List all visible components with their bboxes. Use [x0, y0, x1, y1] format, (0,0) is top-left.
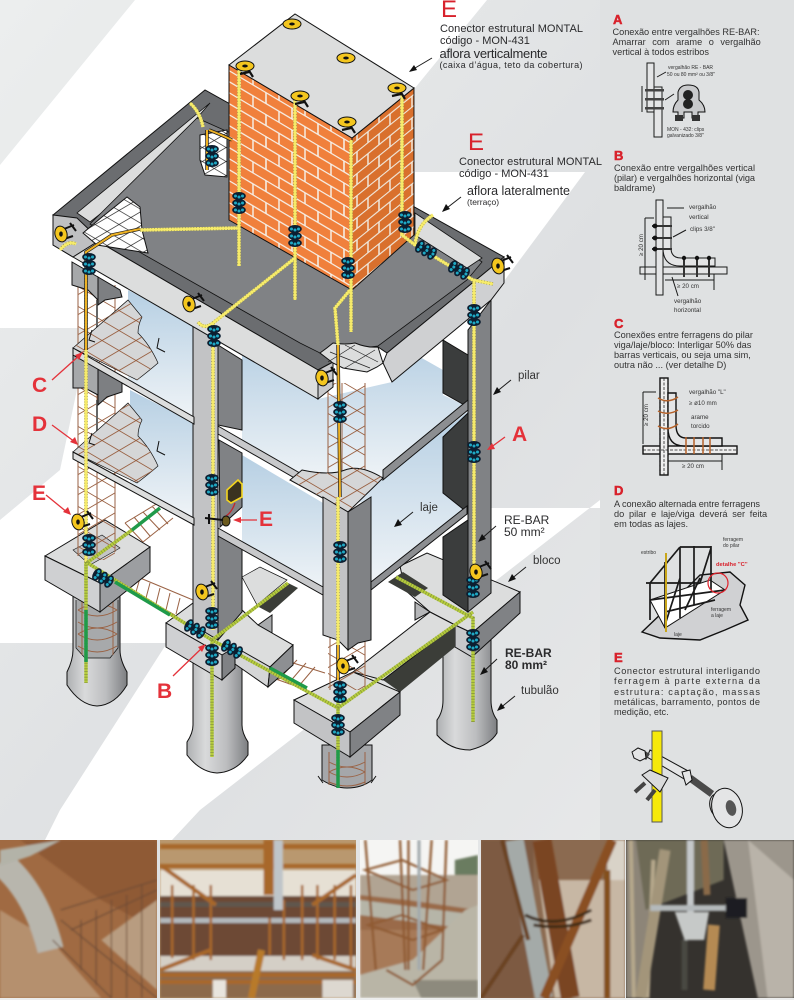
water tank [229, 14, 414, 290]
panel: detail A: A [613, 12, 623, 27]
photo 3: cage on block [360, 840, 478, 998]
callout: E terrace: E [468, 129, 484, 156]
diagram D: ferragem [711, 607, 731, 613]
panel: detail A: vertical à todos estribos [612, 47, 709, 57]
isometric building diagram [45, 14, 520, 788]
centre block [166, 603, 293, 687]
diagram C: torcido [691, 423, 710, 430]
pile right [437, 630, 497, 750]
labels: black [394, 370, 560, 711]
panel: detail B: B [614, 148, 623, 163]
photo 4: tied rebar [481, 840, 625, 998]
panel: detail E [614, 650, 761, 831]
diagram B: clips 3/8" [690, 226, 715, 233]
diagram B: vergalhão [674, 298, 702, 305]
labels: black: bloco [533, 555, 560, 567]
clip clusters [82, 145, 481, 736]
slab bands and surfaces [73, 300, 468, 595]
panel: detail D: do pilar e laje/viga deverá ser feita [614, 509, 768, 519]
callout: E terrace: Conector estrutural MONTAL [459, 156, 602, 168]
labels: red letters: A [512, 423, 527, 446]
pillar right [443, 300, 491, 612]
panel: detail A: Amarrar com arame o vergalhão [612, 37, 761, 47]
panel: detail E: medição, etc. [614, 707, 669, 717]
diagram E [632, 731, 747, 831]
diagram C [643, 378, 737, 475]
junction box [205, 480, 242, 526]
panel: detail D: D [614, 483, 623, 498]
panel: detail C: C [614, 316, 624, 331]
diagram C: vergalhão "L" [689, 389, 726, 396]
panel: detail D: em todas as lajes. [614, 519, 688, 529]
panel: detail E: E [614, 650, 623, 665]
diagram C: ≥ 20 cm [643, 404, 650, 426]
labels: black: laje [420, 502, 438, 514]
diagram A: MON - 432: clips [667, 127, 705, 133]
panel: detail C: barras verticais, ou seja uma sim, [614, 350, 751, 360]
diagram D [641, 537, 748, 640]
callout: E top: código - MON-431 [440, 35, 530, 47]
diagram B: vergalhão [689, 204, 717, 211]
photo 2: formwork and rebar [160, 840, 356, 998]
photo 5: connector in formwork [626, 840, 794, 998]
panel: detail B: baldrame) [614, 183, 655, 193]
callout: E terrace [442, 129, 602, 212]
panel: detail E: metálicas, barramento, pontos de [614, 697, 760, 707]
panel: detail D [614, 483, 768, 640]
labels: red letters: E [32, 482, 46, 505]
labels: red letters: E [259, 508, 273, 531]
diagram A: vergalhão RE - BAR [668, 65, 713, 71]
diagram B: ≥ 20 cm [638, 234, 645, 256]
labels: black: pilar [518, 370, 540, 382]
panel: detail E: Conector estrutural interligando [614, 666, 760, 676]
diagram D: a laje [711, 613, 723, 619]
panel: detail A: Conexão entre vergalhões RE-BAR: [612, 27, 760, 37]
front block [294, 672, 400, 757]
callout: E top: aflora verticalmente [440, 46, 548, 61]
diagram D: ferragem [723, 537, 743, 543]
diagram A: 50 ou 80 mm² ou 3/8" [667, 72, 715, 78]
left column cage and pillar stubs [72, 262, 122, 560]
right block [383, 592, 520, 692]
labels: black: 80 mm² [505, 658, 547, 672]
labels: red letters: B [157, 680, 172, 703]
pillar front cage and lower stub [290, 383, 383, 690]
photo 1: foundation curb [0, 840, 157, 998]
panel: detail C: viga/laje/bloco: Interligar 50% das [614, 340, 752, 350]
callout: E terrace: (terraço) [467, 197, 499, 207]
gold conductors [86, 130, 340, 680]
left block [45, 520, 150, 612]
labels: black: RE-BAR [504, 513, 550, 527]
diagram B: horizontal [674, 307, 701, 314]
pile centre [187, 640, 248, 773]
callout: E terrace: aflora lateralmente [467, 184, 570, 198]
diagram D: detalhe "C" [716, 562, 748, 568]
panel: detail C: Conexões entre ferragens do pilar [614, 330, 753, 340]
panel: detail C [614, 316, 753, 475]
panel: detail D: A conexão alternada entre ferragens [614, 499, 760, 509]
panel: detail A [612, 12, 761, 139]
diagram D: estribo [641, 550, 656, 556]
mesh ladder beams [125, 503, 325, 690]
panel: detail B [614, 148, 756, 314]
labels: black: tubulão [521, 685, 559, 697]
labels: black: RE-BAR [505, 646, 552, 660]
pile left [67, 590, 127, 706]
labels: red letters: C [32, 374, 47, 397]
labels: black: 50 mm² [504, 525, 545, 539]
callout: E top: (caixa d’água, teto da cobertura) [440, 60, 582, 70]
pile front [318, 745, 376, 788]
panel: detail E: estrutura: captação, massas [614, 687, 760, 697]
diagram B: vertical [689, 214, 709, 221]
diagram C: arame [691, 414, 709, 421]
roof slab [53, 90, 504, 399]
panel: detail C: outra não ... (ver detalhe D) [614, 360, 726, 370]
callout: E top [409, 0, 583, 72]
diagram C: ≥ 20 cm [682, 463, 704, 470]
diagram A [642, 63, 715, 139]
diagram A: galvanizado 3/8" [667, 133, 704, 139]
panel: detail E: ferragem à parte externa da [614, 676, 761, 686]
diagram C: ≥ ø10 mm [689, 400, 717, 407]
callout: E terrace: código - MON-431 [459, 168, 549, 180]
beam to front block [353, 612, 455, 680]
callout: E top: Conector estrutural MONTAL [440, 23, 583, 35]
blue walls [128, 290, 470, 592]
diagram B: ≥ 20 cm [677, 283, 699, 290]
panel: detail B: (pilar) e vergalhões horizontal (viga [614, 173, 756, 183]
yellow rebar [60, 70, 493, 645]
back foundation beams [242, 553, 520, 633]
connectors [53, 19, 513, 675]
diagram B [638, 200, 727, 314]
labels: red letters: D [32, 413, 47, 436]
diagram D: do pilar [723, 543, 740, 549]
pillar left-centre [193, 325, 242, 640]
labels: red letters [32, 352, 527, 703]
diagram D: laje [674, 632, 682, 638]
panel: detail B: Conexão entre vergalhões vertical [614, 163, 755, 173]
foundation rebar [86, 508, 473, 788]
